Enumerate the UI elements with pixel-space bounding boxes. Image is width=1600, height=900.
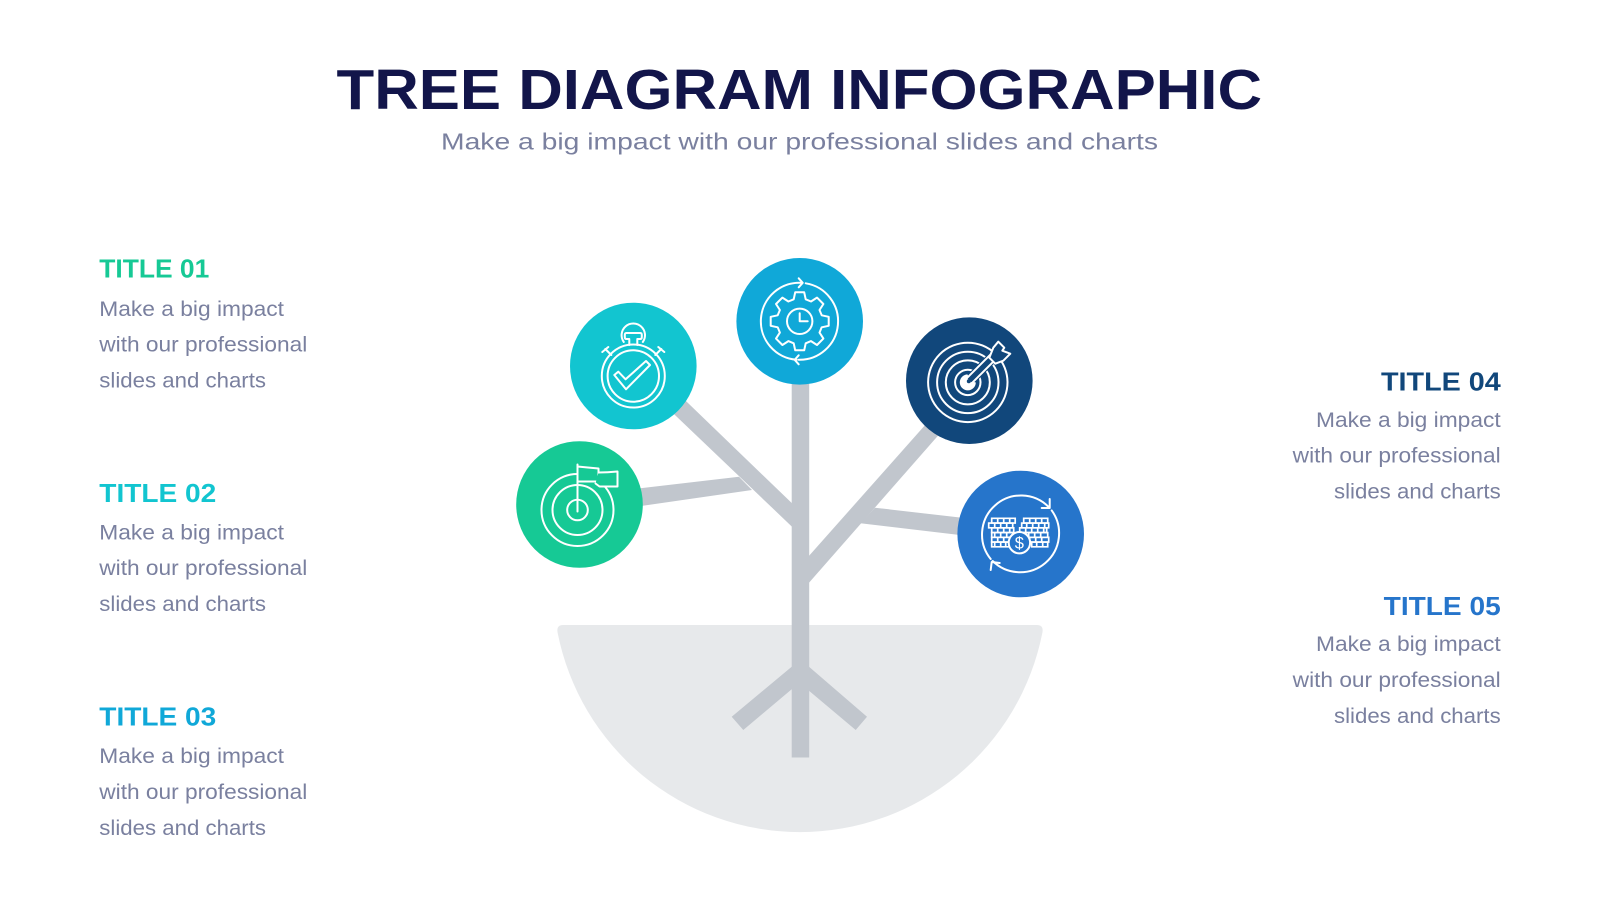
text block: title 01: Make a big impact <box>99 298 284 321</box>
icon: gear with clock <box>736 258 863 385</box>
text block: title 04: slides and charts <box>1334 481 1501 504</box>
text block: title 03: slides and charts <box>99 817 266 840</box>
text block: title 05: with our professional <box>1292 669 1501 692</box>
text block: title 05 <box>1292 593 1501 728</box>
text block: title 01: with our professional <box>98 334 307 356</box>
text block: title 03 <box>98 704 307 840</box>
text block: title 05: Make a big impact <box>1316 633 1501 656</box>
text block: title 02: Make a big impact <box>99 522 284 544</box>
icon: money bricks with cycle arrows <box>957 471 1084 597</box>
icon: target with flags <box>516 441 643 568</box>
text block: title 04: TITLE 04 <box>1381 369 1502 397</box>
text block: title 01: TITLE 01 <box>99 256 209 284</box>
text block: title 05: TITLE 05 <box>1384 593 1501 621</box>
text block: title 05: slides and charts <box>1334 705 1501 728</box>
text block: title 03: with our professional <box>98 781 307 804</box>
icon: bullseye with arrow <box>906 317 1033 444</box>
text block: title 01 <box>98 256 307 392</box>
text block: title 02: TITLE 02 <box>99 480 216 508</box>
text block: title 02: slides and charts <box>99 593 266 616</box>
text block: title 03: TITLE 03 <box>99 704 216 732</box>
text block: title 04 <box>1292 369 1502 504</box>
icon: money bricks with cycle arrows: $ <box>1015 534 1024 552</box>
text block: title 04: with our professional <box>1292 445 1501 468</box>
text block: title 03: Make a big impact <box>99 745 284 768</box>
soil semicircle <box>557 625 1043 832</box>
icon: stopwatch with check <box>570 303 697 429</box>
text block: title 01: slides and charts <box>99 370 266 392</box>
tree trunk, branches and roots <box>620 370 985 758</box>
text block: title 02: with our professional <box>98 557 307 580</box>
text block: title 04: Make a big impact <box>1316 409 1501 432</box>
subtitle: Make a big impact with our professional slides and charts <box>441 128 1158 154</box>
text block: title 02 <box>98 480 307 616</box>
title: TREE DIAGRAM INFOGRAPHIC <box>336 58 1262 122</box>
